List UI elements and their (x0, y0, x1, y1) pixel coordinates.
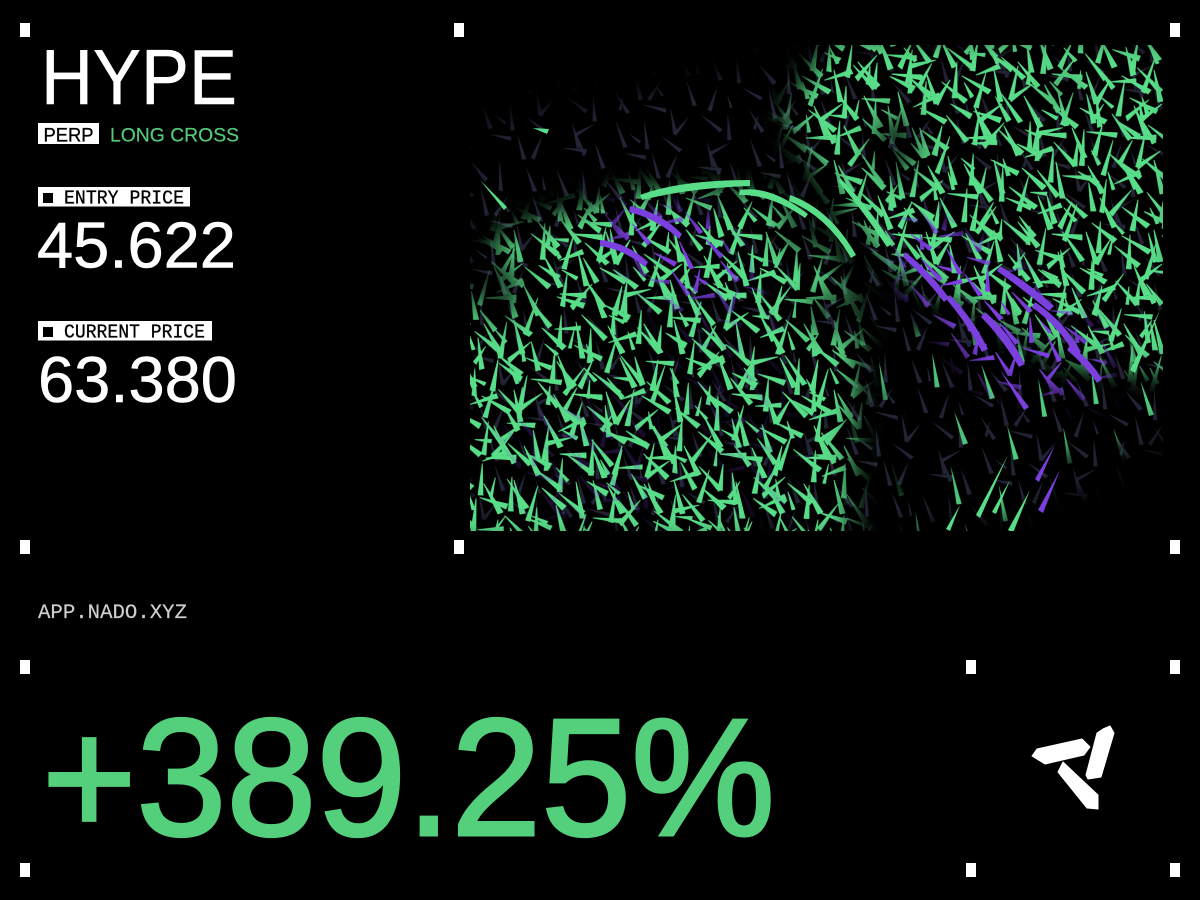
green particle layers (470, 45, 1163, 531)
value: entry price: 45.622 (37, 208, 236, 282)
sparse lower-right spikes (840, 312, 1154, 531)
link: APP.NADO.XYZ: APP.NADO.XYZ (38, 602, 187, 625)
streak accents (480, 128, 1160, 533)
title: HYPE: HYPE (41, 33, 237, 121)
corner mark set: top panel (20, 23, 1180, 554)
particle field (470, 45, 1163, 533)
label: ENTRY PRICE: ENTRY PRICE (64, 188, 184, 210)
label: CURRENT PRICE: CURRENT PRICE (64, 322, 205, 344)
tag: PERP: PERP (44, 124, 94, 146)
corner mark set: bottom panel (20, 660, 1180, 877)
icon: logo (1032, 726, 1114, 809)
headline: percent gain: +389.25% (42, 685, 775, 871)
value: current price: 63.380 (38, 343, 237, 416)
label: LONG CROSS: LONG CROSS (110, 124, 239, 146)
dim particle layer (470, 45, 1163, 531)
purple particle layer (488, 190, 1128, 528)
